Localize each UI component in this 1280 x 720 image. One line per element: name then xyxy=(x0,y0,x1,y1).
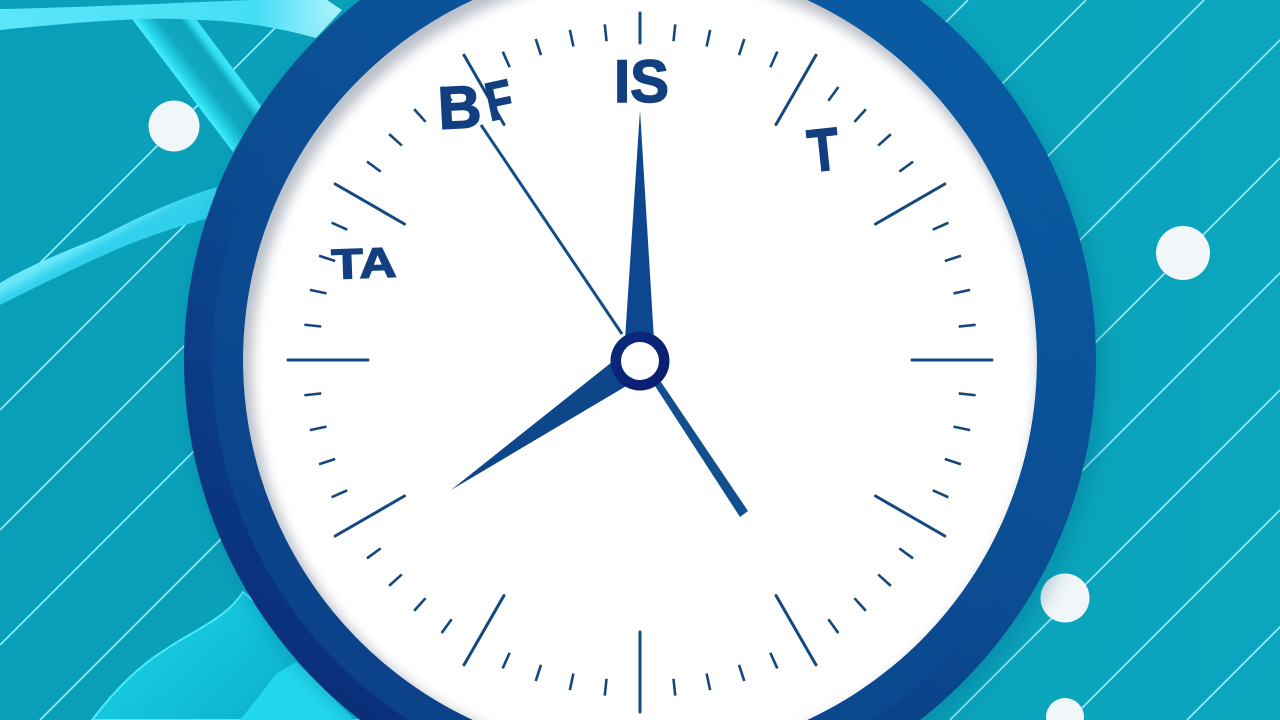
label: TA: TA xyxy=(331,240,397,288)
dot bottom right xyxy=(1046,698,1084,720)
third hand xyxy=(655,382,748,517)
ribbon: middle strand xyxy=(0,187,217,305)
second hand xyxy=(481,125,622,334)
label: IS: IS xyxy=(614,48,669,115)
clock center hub xyxy=(610,332,670,390)
minute hand xyxy=(625,110,654,340)
decorative dots xyxy=(148,100,1210,720)
dot right upper xyxy=(1156,226,1210,280)
clock white face xyxy=(200,0,1080,720)
label: T: T xyxy=(804,115,842,185)
ribbon: diagonal tube top left xyxy=(132,19,261,152)
hour hand xyxy=(451,362,628,490)
dot top left xyxy=(148,100,200,152)
clock ring shadow xyxy=(188,0,1104,720)
label: F: F xyxy=(480,69,518,133)
ribbon: bottom blob xyxy=(92,592,365,720)
dot right lower xyxy=(1040,574,1090,622)
clock outer ring xyxy=(184,0,1096,720)
major hour ticks xyxy=(288,13,992,712)
minor minute ticks xyxy=(311,31,969,689)
label: B: B xyxy=(436,73,483,142)
ribbon: top strand xyxy=(0,0,342,38)
